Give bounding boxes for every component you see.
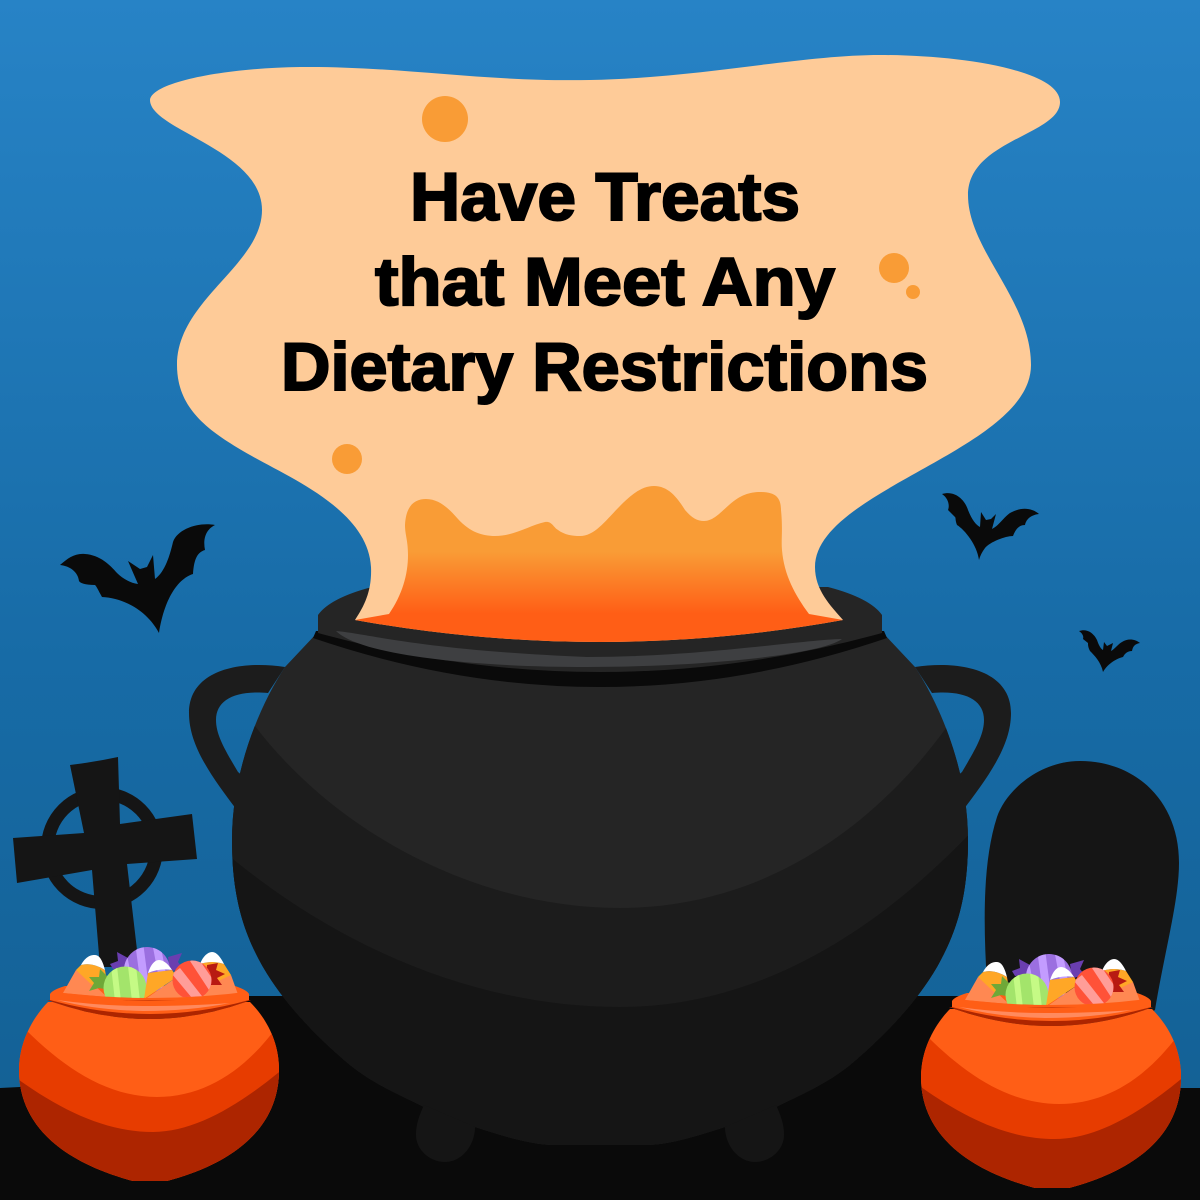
title line 2: that Meet Any: [375, 244, 835, 320]
pot body: [10, 1000, 290, 1190]
bat: upper right: [942, 493, 1039, 560]
bat: large left: [60, 524, 215, 633]
bubble: [879, 253, 909, 283]
pot rim back: [50, 986, 249, 1000]
pot rim front: [50, 994, 249, 1014]
right foot: [725, 1105, 784, 1162]
candies: [63, 942, 240, 1010]
pot rim shadow: [47, 1000, 251, 1019]
title: [281, 159, 928, 405]
cauldron rim: [318, 587, 882, 672]
celtic cross gravestone: [13, 757, 197, 967]
rim highlight: [57, 1000, 230, 1011]
ground: [0, 996, 1200, 1200]
rounded tombstone: [985, 761, 1179, 1040]
rim shadow band: [313, 631, 887, 687]
rim highlight: [336, 631, 842, 667]
bubbling brew flame: [355, 486, 843, 642]
right handle: [915, 665, 1011, 814]
bubble: [906, 285, 920, 299]
left treat pot: [10, 942, 290, 1190]
bubble: [332, 444, 362, 474]
right treat pot: [912, 949, 1192, 1197]
steam cloud: [150, 55, 1060, 642]
left foot: [416, 1105, 475, 1162]
left handle: [189, 665, 285, 814]
bubble: [422, 96, 468, 142]
bat: small right: [1079, 630, 1140, 672]
cauldron: [189, 587, 1011, 1200]
title line 3: Dietary Restrictions: [281, 329, 928, 405]
title line 1: Have Treats: [410, 159, 800, 235]
cauldron body: [232, 636, 968, 1145]
